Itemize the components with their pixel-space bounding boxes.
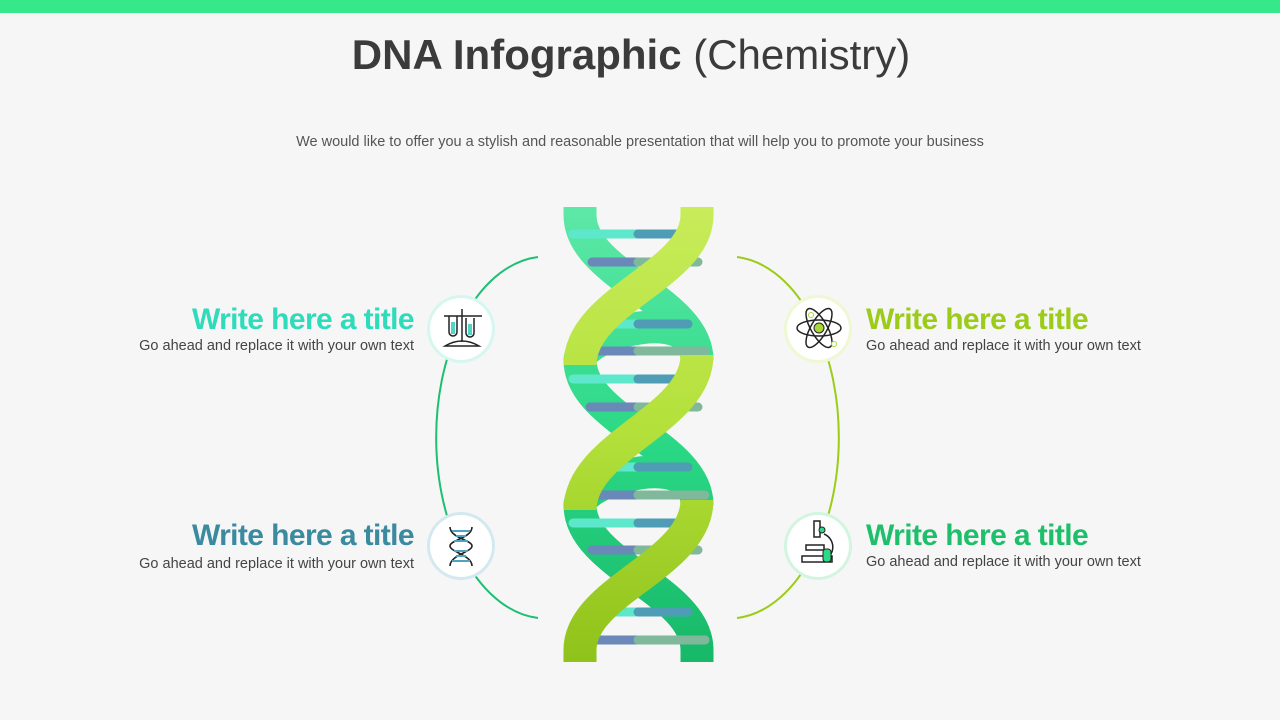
- block: bottom right: [866, 519, 1141, 570]
- block: top left: Go ahead and replace it with your own text: [139, 338, 414, 354]
- block: top right: Write here a title: [866, 303, 1088, 336]
- top bar: [0, 0, 1280, 13]
- block: top right: Go ahead and replace it with your own text: [866, 338, 1141, 354]
- block: bottom left: [139, 519, 414, 572]
- block: bottom left: Go ahead and replace it with your own text: [139, 556, 414, 572]
- block: bottom right: Write here a title: [866, 519, 1088, 552]
- title: DNA Infographic (Chemistry): [352, 31, 910, 78]
- block: top right: [866, 303, 1141, 354]
- dna helix: [573, 207, 705, 662]
- block: bottom left: Write here a title: [192, 519, 414, 552]
- arc left: [436, 257, 538, 618]
- block: top left: Write here a title: [192, 303, 414, 336]
- icon circle 3: atom: [784, 295, 852, 363]
- arc right: [737, 257, 839, 618]
- icon circle 1: test tubes: [427, 295, 495, 363]
- block: bottom right: Go ahead and replace it with your own text: [866, 554, 1141, 570]
- icon circle 2: dna: [427, 512, 495, 580]
- block: top left: [139, 303, 414, 354]
- subtitle: We would like to offer you a stylish and reasonable presentation that will help you to promote your business: [296, 134, 984, 150]
- icon circle 4: microscope: [784, 512, 852, 580]
